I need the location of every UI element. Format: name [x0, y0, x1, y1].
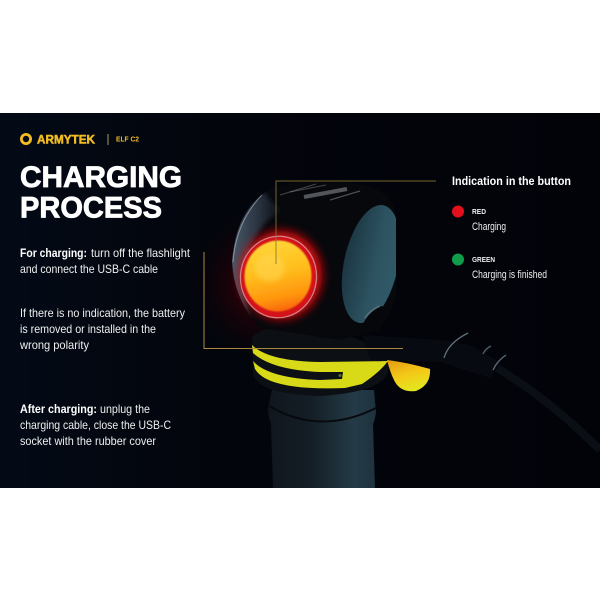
text block: no indication: If there is no indication, the battery [20, 306, 185, 320]
left crescent highlight [232, 192, 279, 316]
head shading [232, 192, 396, 323]
glowing lens [241, 237, 315, 315]
side disc [342, 205, 396, 323]
text block: after charging: unplug the [100, 402, 150, 416]
text block: for charging: turn off the flashlight [91, 246, 191, 260]
lens rim [236, 232, 321, 322]
legend: green [452, 254, 547, 281]
text block: after charging: After charging: [20, 402, 97, 416]
brand logo: ARMYTEK [37, 132, 95, 146]
text block: no indication: wrong polarity [19, 338, 89, 352]
legend: red [452, 206, 506, 233]
USB cable [362, 333, 600, 450]
callout line to USB socket [204, 252, 403, 348]
legend: green: Charging is finished [472, 269, 547, 281]
cable cord [497, 368, 600, 450]
indication heading: Indication in the button [452, 174, 571, 188]
logo ring [21, 134, 31, 144]
legend: red: Charging [472, 221, 506, 233]
text block: for charging [20, 246, 191, 276]
head rim highlight [233, 195, 262, 262]
text block: after charging: socket with the rubber cover [20, 434, 156, 448]
yellow bands [252, 345, 388, 388]
text block: for charging: and connect the USB-C cable [20, 262, 158, 276]
red glow behind lens [192, 210, 332, 360]
cable plug [362, 335, 500, 378]
title: CHARGING [20, 161, 182, 194]
yellow rubber cover tab [387, 360, 430, 391]
flashlight illustration [228, 181, 600, 488]
lens glow [240, 231, 322, 319]
text block: after charging [20, 402, 171, 448]
lens hot spot [255, 254, 285, 282]
brand logo [21, 132, 139, 146]
cable strain relief rings [444, 333, 468, 358]
legend: red: RED [472, 209, 486, 216]
engraved label on head [280, 184, 360, 200]
infographic canvas [0, 113, 600, 488]
text block: no indication: is removed or installed in the [20, 322, 156, 336]
flashlight body tube [268, 390, 376, 488]
text block: after charging: charging cable, close the USB-C [20, 418, 171, 432]
collar with yellow bands [252, 325, 388, 396]
head of flashlight [232, 181, 396, 340]
callout line to button [276, 181, 436, 264]
band slot end [338, 374, 342, 377]
text block: no indication [19, 306, 185, 352]
brand logo: ELF C2 [116, 136, 139, 144]
dark banner background [0, 113, 600, 488]
legend: green: GREEN [472, 257, 495, 264]
disc notch [364, 306, 383, 323]
title [20, 161, 182, 224]
title: PROCESS [20, 192, 162, 224]
text block: for charging: For charging: [20, 246, 87, 260]
